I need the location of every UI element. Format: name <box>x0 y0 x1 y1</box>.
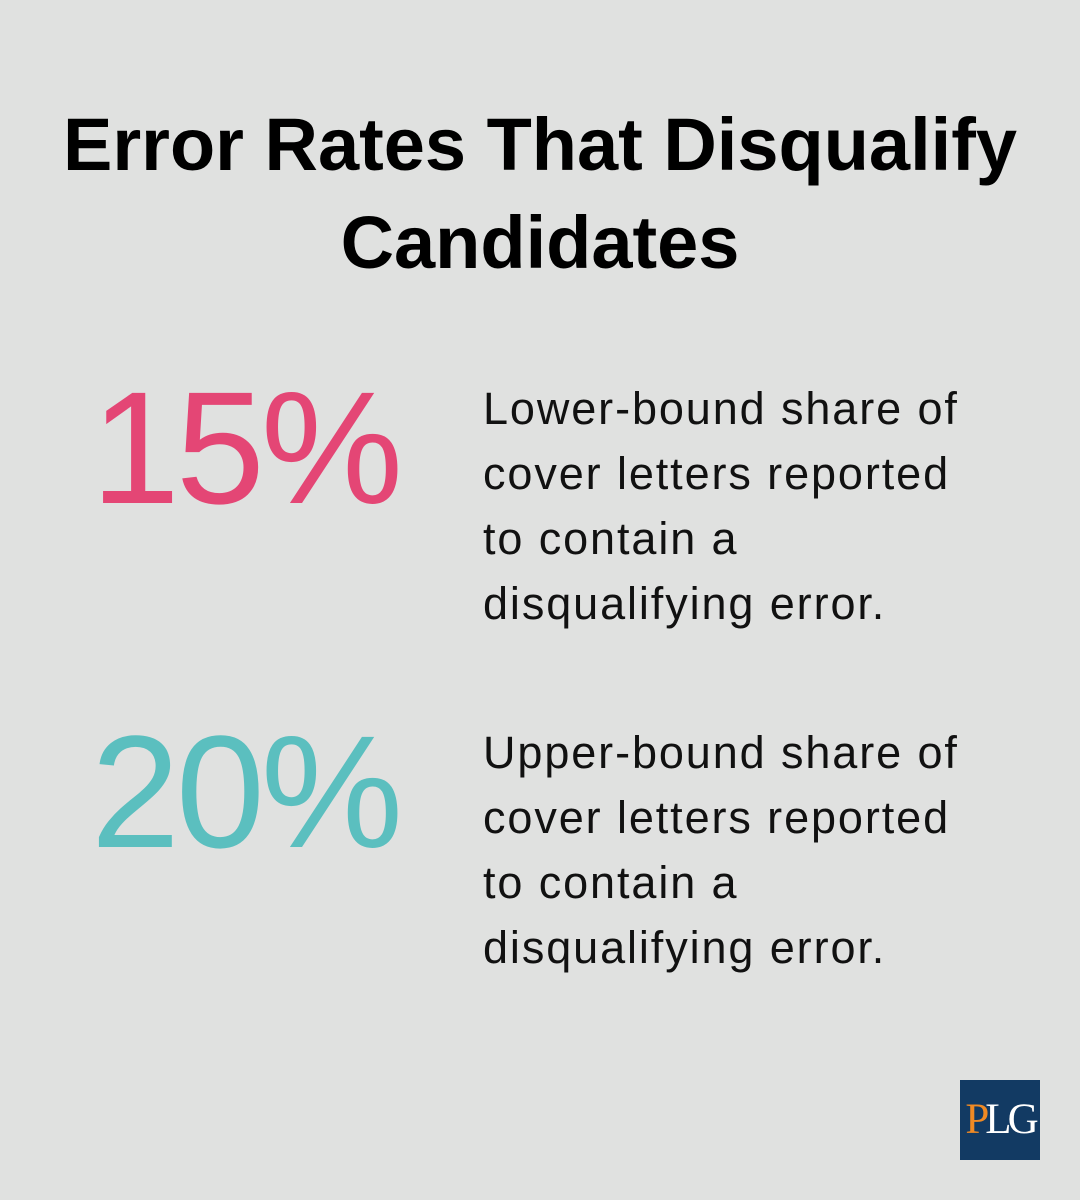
logo: PLG <box>960 1080 1040 1160</box>
stat: 15%: 15% <box>91 358 399 537</box>
title <box>63 103 1017 284</box>
text: lower bound: disqualifying error. <box>483 578 886 629</box>
stat: 20%: 20% <box>91 702 399 881</box>
text: upper bound: cover letters reported <box>483 792 950 843</box>
text: lower bound <box>483 383 959 629</box>
title: Error Rates That Disqualify <box>63 103 1017 186</box>
logo: PLG: PLG <box>965 1096 1035 1143</box>
text: lower bound: to contain a <box>483 513 738 564</box>
text: upper bound: to contain a <box>483 857 738 908</box>
text: lower bound: Lower-bound share of <box>483 383 959 434</box>
text: lower bound: cover letters reported <box>483 448 950 499</box>
text: upper bound: Upper-bound share of <box>483 727 959 778</box>
text: upper bound <box>483 727 959 973</box>
text: upper bound: disqualifying error. <box>483 922 886 973</box>
title: Candidates <box>341 201 739 284</box>
